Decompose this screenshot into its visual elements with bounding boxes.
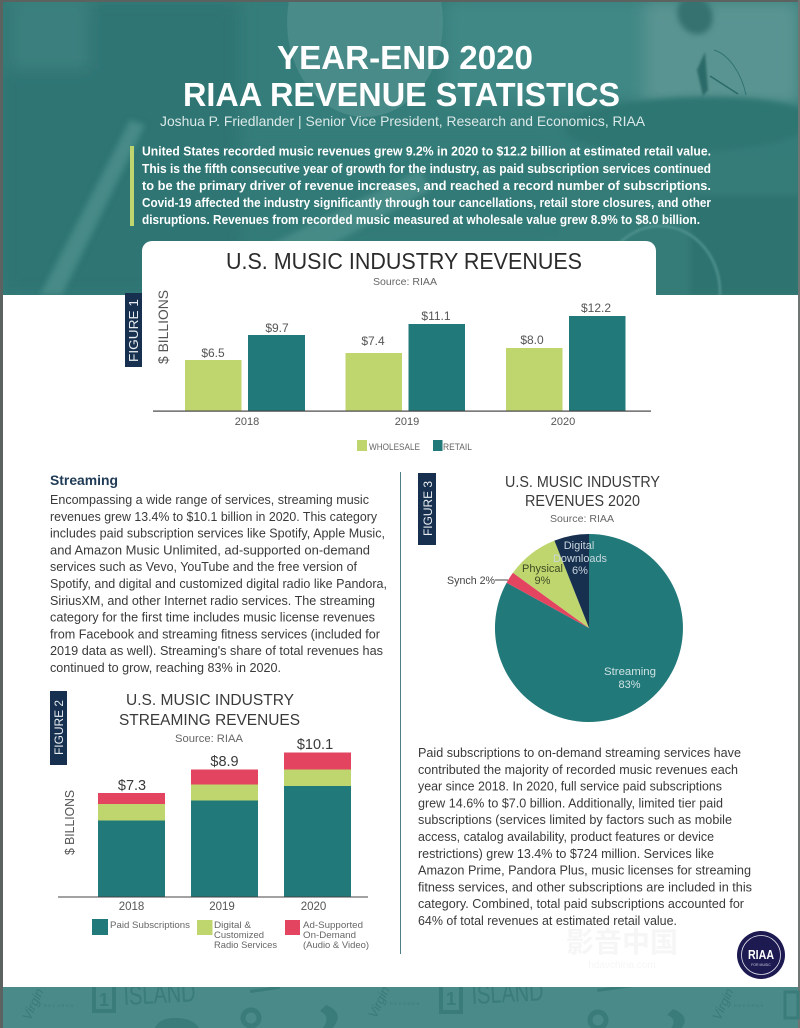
label: physical xyxy=(522,563,563,587)
footer label pattern band xyxy=(3,987,800,1028)
pie slices xyxy=(495,534,683,722)
text block: paid subscriptions: grew 14.6% to $7.0 billion. Additionally, limited tier paid xyxy=(418,795,723,810)
streaming paragraph: and Amazon Music Unlimited, ad-supported on-demand xyxy=(50,542,370,557)
chart heading: U.S. MUSIC INDUSTRY xyxy=(505,474,660,491)
chart source: Source: RIAA xyxy=(175,733,244,745)
white body background xyxy=(3,295,798,987)
legend xyxy=(92,919,369,951)
text block: paid subscriptions: 64% of total revenues at estimated retail value. xyxy=(418,913,677,928)
intro text: to be the primary driver of revenue increases, and reached a record number of subscriptions. xyxy=(142,179,711,193)
panel: figure 2 streaming revenues chart xyxy=(50,691,369,951)
streaming heading: Streaming xyxy=(50,472,118,488)
figure tag xyxy=(125,293,142,367)
chart heading: U.S. MUSIC INDUSTRY REVENUES xyxy=(226,248,582,274)
author byline: Joshua P. Friedlander | Senior Vice President, Research and Economics, RIAA xyxy=(160,113,646,129)
chart heading xyxy=(119,692,300,729)
chart source: Source: RIAA xyxy=(550,513,614,525)
streaming paragraph: includes paid subscription services like Spotify, Apple Music, xyxy=(50,526,385,541)
label: physical: 9% xyxy=(535,575,551,587)
watermark: hdavchina.com xyxy=(588,960,656,971)
icon: RIAA logo: RIAA xyxy=(748,947,774,962)
bars xyxy=(185,316,626,411)
legend: Ad-Supported xyxy=(303,920,363,931)
label: streaming: 83% xyxy=(618,679,641,691)
text block: paid subscriptions: restrictions) grew 13.4% to $724 million. Services like xyxy=(418,846,714,861)
value labels xyxy=(118,737,333,794)
text block: paid subscriptions: Paid subscriptions to on-demand streaming services have xyxy=(418,745,741,760)
axis xyxy=(153,410,651,412)
year labels: 2018 xyxy=(119,901,144,913)
text block: streaming xyxy=(50,472,387,675)
year labels: 2020 xyxy=(551,416,575,428)
title: RIAA REVENUE STATISTICS xyxy=(183,76,620,113)
footer label pattern band: Virgin xyxy=(709,986,737,1022)
legend: Radio Services xyxy=(214,940,277,951)
streaming paragraph: revenues grew 13.4% to $10.1 billion in 2020. This category xyxy=(50,509,377,524)
value labels xyxy=(201,301,611,360)
year labels: 2019 xyxy=(395,416,419,428)
axis xyxy=(58,896,368,898)
figure tag xyxy=(50,691,67,765)
year labels xyxy=(235,416,575,428)
streaming paragraph: category for the first time includes music license revenues xyxy=(50,610,375,625)
card background xyxy=(142,241,656,300)
legend: On-Demand xyxy=(303,930,356,941)
chart heading: REVENUES 2020 xyxy=(525,493,640,510)
title: YEAR-END 2020 xyxy=(277,39,533,76)
legend: WHOLESALE xyxy=(369,442,420,453)
text block: paid subscriptions: year since 2018. In 2020, full service paid subscriptions xyxy=(418,779,722,794)
footer label pattern band: ISLAND xyxy=(471,976,544,1010)
text block: paid subscriptions: access, catalog availability, product features or device xyxy=(418,829,714,844)
intro text: Covid-19 affected the industry significantly through tour cancellations, retail store closures, and other xyxy=(142,196,711,210)
figure tag xyxy=(418,473,436,545)
streaming paragraph: Encompassing a wide range of services, streaming music xyxy=(50,492,369,507)
streaming paragraph: 2019 data as well). Streaming's share of total revenues has xyxy=(50,643,383,658)
label: digital downloads xyxy=(553,540,607,577)
footer label pattern band: Virgin xyxy=(365,984,393,1020)
streaming paragraph: from Facebook and streaming fitness services (included for xyxy=(50,626,381,641)
chart source: Source: RIAA xyxy=(373,276,437,288)
footer label pattern band: ISLAND xyxy=(123,977,196,1011)
intro text: This is the fifth consecutive year of growth for the industry, as paid subscription services continued xyxy=(142,162,711,176)
intro text xyxy=(142,144,711,227)
column divider xyxy=(400,472,401,954)
text block: paid subscriptions: category. Combined, total paid subscriptions accounted for xyxy=(418,896,745,911)
legend: Paid Subscriptions xyxy=(110,920,190,931)
value labels: $10.1 xyxy=(297,737,333,753)
header photo background xyxy=(3,2,798,295)
panel: figure 3 pie chart xyxy=(418,473,683,722)
value labels: $7.3 xyxy=(118,778,146,794)
label: streaming xyxy=(604,666,656,691)
chart heading xyxy=(505,474,660,510)
legend: Digital & xyxy=(214,920,252,931)
footer label pattern band: 1 xyxy=(99,990,109,1010)
year labels: 2020 xyxy=(301,901,326,913)
year labels xyxy=(119,901,326,913)
streaming paragraph: SiriusXM, and other Internet radio services. The streaming xyxy=(50,593,375,608)
label: synch: Synch 2% xyxy=(447,575,495,587)
footer label pattern band: RECORDS xyxy=(734,1003,765,1008)
lit drum disc xyxy=(287,0,443,117)
streaming paragraph: Spotify, and digital and customized digital radio like Pandora, xyxy=(50,576,387,591)
legend: (Audio & Video) xyxy=(303,940,369,951)
figure tag: FIGURE 2 xyxy=(52,700,66,755)
value labels: $12.2 xyxy=(581,301,611,315)
intro paragraph xyxy=(130,144,711,227)
label: digital downloads: Downloads xyxy=(553,553,607,565)
text block: paid subscriptions: fitness services, and other subscriptions are included in this xyxy=(418,879,752,894)
footer label pattern band: Virgin xyxy=(19,986,47,1022)
panel: figure 1 revenues chart xyxy=(125,241,656,453)
footer label pattern band: RECORDS xyxy=(44,1003,75,1008)
figure tag: FIGURE 3 xyxy=(421,481,435,536)
text block: paid subscriptions xyxy=(418,745,752,928)
stacked bars xyxy=(98,752,351,897)
legend xyxy=(357,440,472,453)
value labels: $8.9 xyxy=(210,754,239,770)
value labels: $7.4 xyxy=(361,334,385,348)
value labels: $8.0 xyxy=(520,333,544,347)
intro text: United States recorded music revenues grew 9.2% in 2020 to $12.2 billion at estimated retail value. xyxy=(142,144,711,158)
year labels: 2019 xyxy=(209,901,235,913)
text block: paid subscriptions: subscriptions (services limited by factors such as mobile xyxy=(418,812,732,827)
streaming paragraph: services such as Vevo, YouTube and the free version of xyxy=(50,559,357,574)
intro text: disruptions. Revenues from recorded music measured at wholesale value grew 8.9% to $8.0 billion. xyxy=(142,213,700,227)
streaming paragraph xyxy=(50,492,387,675)
label: streaming: Streaming xyxy=(604,666,656,678)
y axis label: $ BILLIONS xyxy=(156,290,171,364)
watermark: 影音中国 xyxy=(566,927,678,958)
figure tag: FIGURE 1 xyxy=(127,299,141,362)
value labels: $6.5 xyxy=(201,346,225,360)
icon: RIAA logo: FOR MUSIC xyxy=(751,963,771,967)
chart heading: U.S. MUSIC INDUSTRY xyxy=(126,692,294,709)
text block: paid subscriptions: Amazon Prime, Pandora Plus, music licenses for streaming xyxy=(418,863,751,878)
chart heading: STREAMING REVENUES xyxy=(119,712,300,729)
streaming paragraph: continued to grow, reaching 83% in 2020. xyxy=(50,660,281,675)
value labels: $11.1 xyxy=(421,309,451,323)
legend: RETAIL xyxy=(443,442,472,453)
label: physical: Physical xyxy=(522,563,563,575)
legend: Customized xyxy=(214,930,264,941)
footer label pattern band: 1 xyxy=(446,989,456,1009)
year labels: 2018 xyxy=(235,416,259,428)
y axis label: $ BILLIONS xyxy=(63,790,77,855)
text block: paid subscriptions: contributed the majority of recorded music revenues each xyxy=(418,762,738,777)
accent bar xyxy=(130,146,134,226)
label: digital downloads: 6% xyxy=(572,565,588,577)
footer label pattern band: RECORDS xyxy=(390,1001,421,1006)
icon: RIAA logo xyxy=(737,931,785,979)
title xyxy=(183,39,620,113)
label: digital downloads: Digital xyxy=(564,540,594,552)
value labels: $9.7 xyxy=(265,321,289,335)
